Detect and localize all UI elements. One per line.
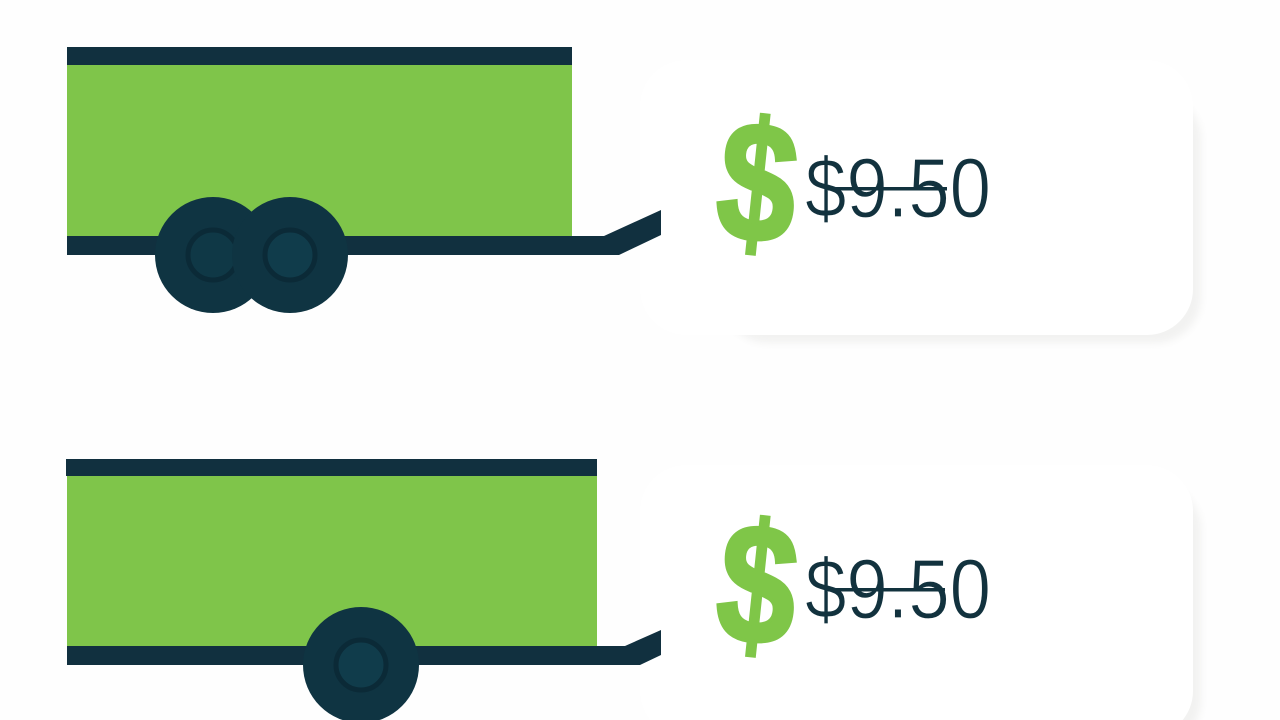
icon: tandem-axle trailer [67, 47, 661, 313]
left wheel [155, 197, 271, 313]
icon: green dollar sign: $ [709, 84, 806, 282]
icon: green dollar sign: $ [709, 486, 806, 684]
panel: top price card [640, 60, 1201, 343]
icon: single-axle trailer [66, 459, 661, 720]
trailer top rail [67, 47, 572, 65]
right wheel [232, 197, 348, 313]
trailer top rail [66, 459, 597, 476]
trailer chassis and tongue [67, 210, 661, 255]
trailer green body [67, 476, 597, 646]
price: struck-through $9.50: $9.50 [805, 141, 991, 235]
trailer chassis and tongue [67, 630, 661, 665]
trailer green body [67, 65, 572, 236]
price: struck-through $9.50: $9.50 [805, 542, 991, 636]
wheel [303, 607, 419, 720]
panel: bottom price card [640, 465, 1201, 720]
